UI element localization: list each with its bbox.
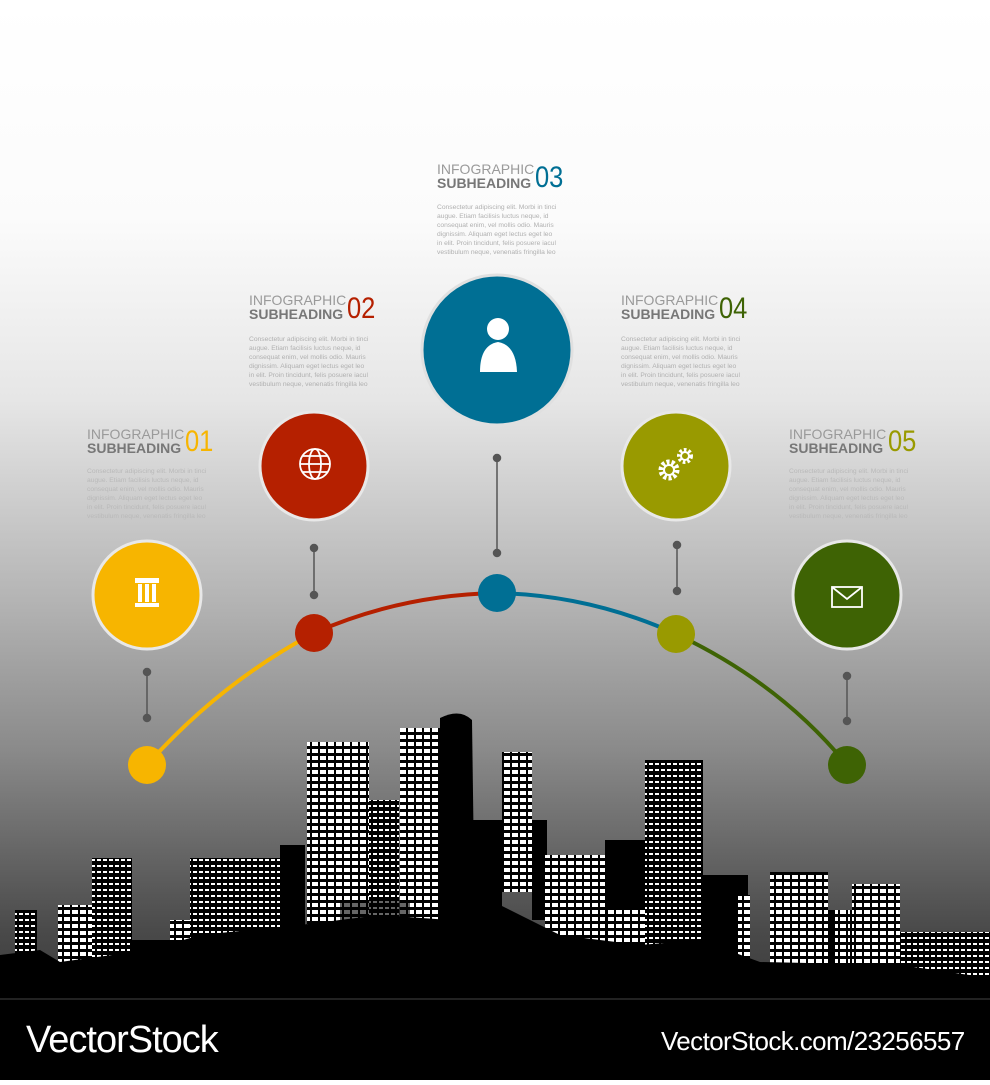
heading 02: INFOGRAPHIC — [249, 292, 346, 308]
footer band — [0, 999, 990, 1080]
circle 02: globe — [260, 412, 368, 520]
heading 04: dignissim. Aliquam eget lectus eget leo — [621, 363, 737, 370]
heading 04: INFOGRAPHIC — [621, 292, 718, 308]
circle 01: pillar — [93, 541, 201, 649]
circle 04: gears — [622, 412, 730, 520]
heading 01: 01 — [185, 424, 213, 457]
heading 05: vestibulum neque, venenatis fringilla leo — [789, 513, 908, 520]
heading 01: augue. Etiam facilisis luctus neque, id — [87, 477, 199, 484]
heading 03: Consectetur adipiscing elit. Morbi in tinci — [437, 204, 557, 211]
heading 04: Consectetur adipiscing elit. Morbi in tinci — [621, 336, 741, 343]
heading 05 — [789, 424, 916, 520]
heading 03: 03 — [535, 160, 563, 193]
heading 02: SUBHEADING — [249, 306, 343, 322]
heading 02: vestibulum neque, venenatis fringilla leo — [249, 381, 368, 388]
heading 03: SUBHEADING — [437, 175, 531, 191]
heading 05: Consectetur adipiscing elit. Morbi in tinci — [789, 468, 909, 475]
heading 01: vestibulum neque, venenatis fringilla leo — [87, 513, 206, 520]
heading 02 — [249, 291, 375, 388]
arc nodes — [128, 574, 866, 784]
heading 03: in elit. Proin tincidunt, felis posuere iacul — [437, 240, 556, 247]
heading 01: INFOGRAPHIC — [87, 426, 184, 442]
heading 05: 05 — [888, 424, 916, 457]
heading 03 — [437, 160, 563, 256]
heading 05: consequat enim, vel mollis odio. Mauris — [789, 486, 906, 493]
heading 01: consequat enim, vel mollis odio. Mauris — [87, 486, 204, 493]
heading 01 — [87, 424, 213, 520]
heading 03: augue. Etiam facilisis luctus neque, id — [437, 213, 549, 220]
heading 04: SUBHEADING — [621, 306, 715, 322]
heading 04: in elit. Proin tincidunt, felis posuere iacul — [621, 372, 740, 379]
heading 01: dignissim. Aliquam eget lectus eget leo — [87, 495, 203, 502]
arc — [147, 593, 847, 765]
heading 02: dignissim. Aliquam eget lectus eget leo — [249, 363, 365, 370]
heading 04: consequat enim, vel mollis odio. Mauris — [621, 354, 738, 361]
heading 03: dignissim. Aliquam eget lectus eget leo — [437, 231, 553, 238]
heading 04 — [621, 291, 747, 388]
heading 02: augue. Etiam facilisis luctus neque, id — [249, 345, 361, 352]
circle 05: envelope — [793, 541, 901, 649]
title blocks — [87, 160, 916, 520]
heading 02: consequat enim, vel mollis odio. Mauris — [249, 354, 366, 361]
heading 03: consequat enim, vel mollis odio. Mauris — [437, 222, 554, 229]
heading 05: INFOGRAPHIC — [789, 426, 886, 442]
heading 05: SUBHEADING — [789, 440, 883, 456]
footer band: VectorStock.com/23256557 — [661, 1026, 965, 1056]
heading 03: INFOGRAPHIC — [437, 161, 534, 177]
heading 04: augue. Etiam facilisis luctus neque, id — [621, 345, 733, 352]
connectors — [144, 454, 850, 724]
footer band: VectorStock — [26, 1019, 220, 1061]
heading 01: Consectetur adipiscing elit. Morbi in tinci — [87, 468, 207, 475]
heading 02: Consectetur adipiscing elit. Morbi in tinci — [249, 336, 369, 343]
heading 05: in elit. Proin tincidunt, felis posuere iacul — [789, 504, 908, 511]
circle 03: person — [422, 275, 572, 425]
heading 03: vestibulum neque, venenatis fringilla leo — [437, 249, 556, 256]
heading 01: in elit. Proin tincidunt, felis posuere iacul — [87, 504, 206, 511]
city skyline — [0, 713, 990, 1000]
heading 02: in elit. Proin tincidunt, felis posuere iacul — [249, 372, 368, 379]
heading 02: 02 — [347, 291, 375, 324]
heading 05: augue. Etiam facilisis luctus neque, id — [789, 477, 901, 484]
heading 01: SUBHEADING — [87, 440, 181, 456]
heading 04: vestibulum neque, venenatis fringilla leo — [621, 381, 740, 388]
heading 04: 04 — [719, 291, 747, 324]
heading 05: dignissim. Aliquam eget lectus eget leo — [789, 495, 905, 502]
